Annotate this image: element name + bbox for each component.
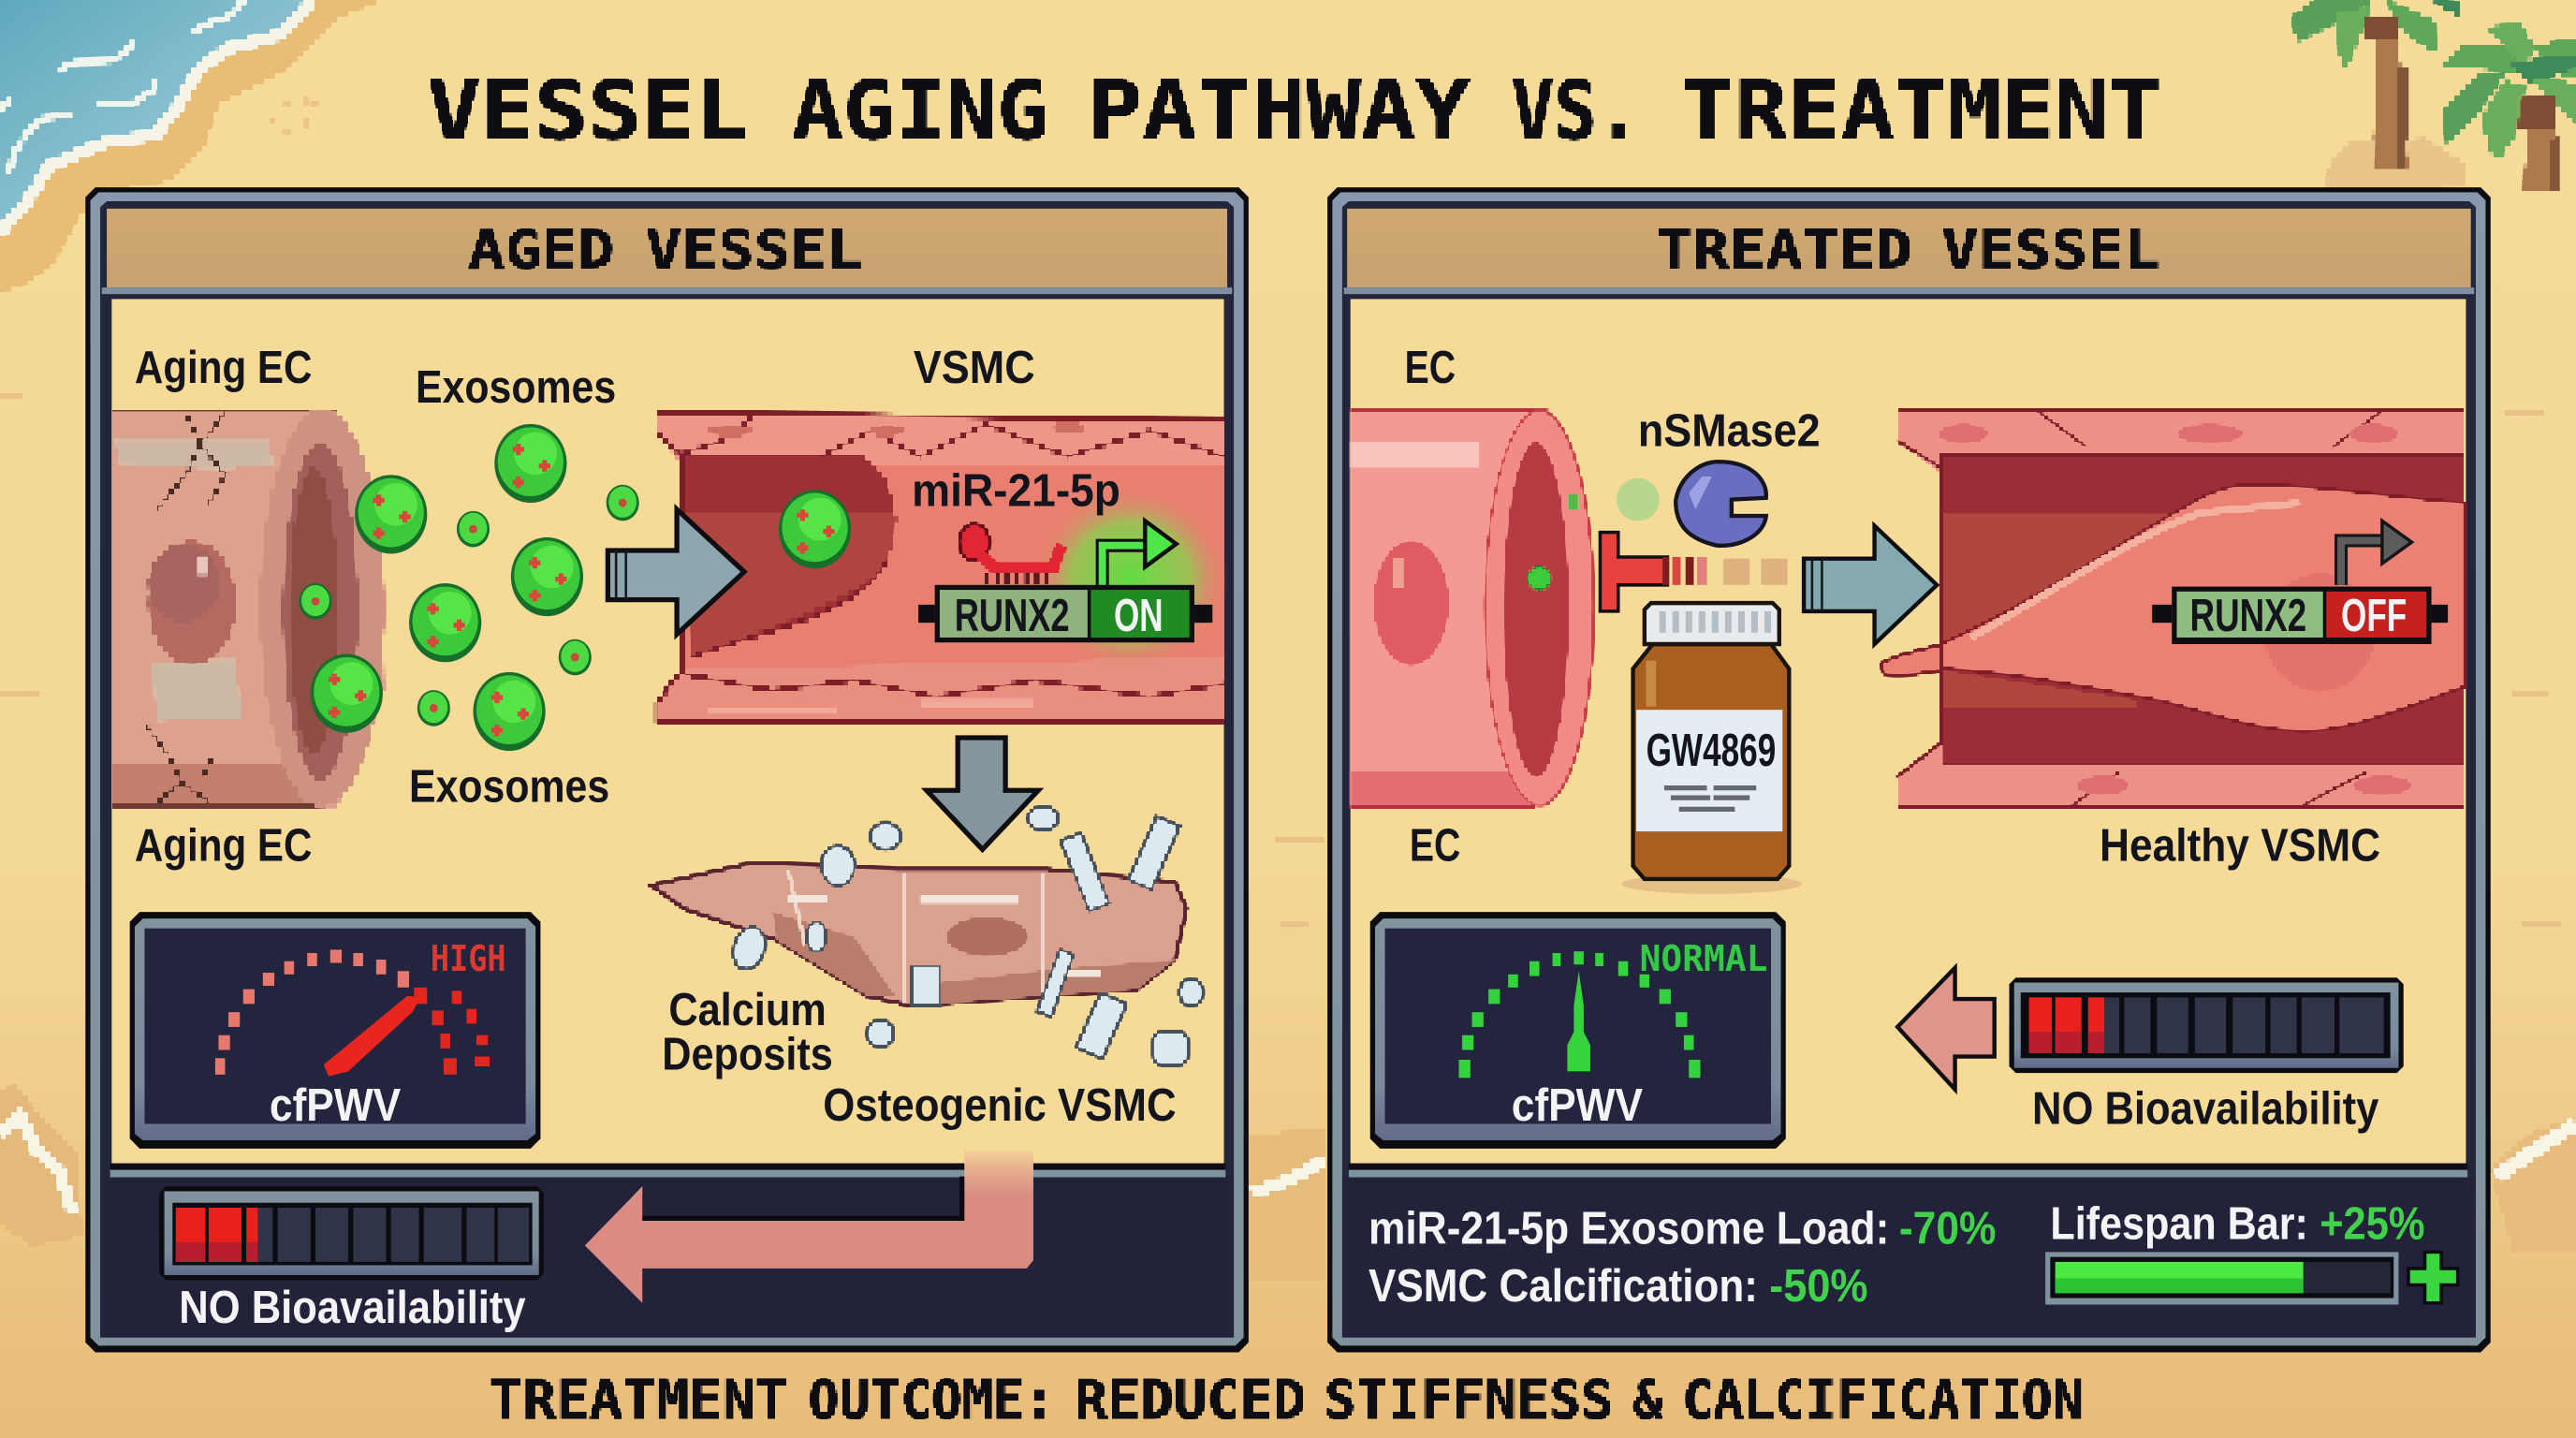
gauge panel: cfPWV normal [1370, 912, 1786, 1149]
footer outcome: REDUCED [1075, 1371, 1306, 1431]
illustration: GW4869 bottle [1621, 603, 1802, 894]
heading: treated vessel: TREATED [1656, 220, 1912, 281]
lifespan bar: +25% [2320, 1198, 2425, 1249]
labels: treated vessel: EC [1405, 343, 1456, 393]
heading: aged vessel [468, 220, 862, 281]
arrow: NO bar to gauge [1897, 968, 1995, 1090]
labels: aged vessel: Calcium [668, 985, 827, 1035]
footer outcome: OUTCOME: [809, 1371, 1055, 1431]
arrow: down to osteogenic VSMC [927, 738, 1038, 849]
outcome stats: VSMC Calcification: [1368, 1261, 1758, 1312]
labels: aged vessel: Deposits [662, 1030, 833, 1080]
labels: treated vessel: nSMase2 [1638, 406, 1821, 457]
RUNX2 OFF gene switch: OFF [2341, 591, 2407, 641]
RUNX2 ON gene switch with glow: ON [1114, 591, 1164, 641]
arrow: treatment to VSMC [1804, 526, 1937, 644]
exosome inside lumen [779, 490, 851, 568]
illustration: healthy EC cylinder [1351, 409, 1593, 809]
labels: aged vessel [135, 343, 1177, 1131]
exosomes [299, 424, 639, 751]
heading: aged vessel: AGED [468, 220, 614, 281]
heading: treated vessel: VESSEL [1942, 220, 2160, 281]
gauge panel: cfPWV normal: NORMAL [1640, 938, 1767, 980]
title: VS. [1512, 63, 1640, 158]
gauge panel: cfPWV high: cfPWV [270, 1080, 401, 1131]
gauge panel: cfPWV normal: cfPWV [1512, 1080, 1643, 1131]
labels: aged vessel: Aging EC [135, 343, 312, 393]
labels: aged vessel: miR-21-5p [912, 466, 1120, 517]
fading exosome [1617, 478, 1660, 521]
miRNA binding red [959, 524, 1061, 585]
labels: treated vessel: Healthy VSMC [2100, 821, 2380, 872]
illustration: GW4869 bottle: GW4869 [1647, 726, 1776, 776]
labels: aged vessel: VSMC [914, 343, 1035, 393]
title: TREATMENT [1680, 63, 2162, 158]
labels: aged vessel: Aging EC [135, 821, 312, 872]
illustration: aging endothelial cell cylinder [111, 409, 385, 809]
icon: nSMase2 enzyme [1676, 462, 1766, 546]
illustration: healthy VSMC vessel [1881, 411, 2465, 807]
illustration: osteogenic VSMC with calcium deposits [652, 807, 1203, 1064]
NO bioavailability bar: aged: NO Bioavailability [179, 1283, 526, 1333]
gauge panel: cfPWV high: HIGH [431, 938, 506, 980]
RUNX2 OFF gene switch: RUNX2 [2190, 591, 2306, 641]
heading: aged vessel: VESSEL [646, 220, 862, 281]
NO bioavailability bar: treated [2009, 977, 2404, 1134]
lifespan bar: Lifespan Bar: [2050, 1198, 2308, 1249]
title: PATHWAY [1088, 63, 1471, 158]
RUNX2 OFF gene switch [2152, 521, 2448, 644]
NO bioavailability bar: treated: NO Bioavailability [2032, 1083, 2379, 1134]
palm trees [2291, 0, 2576, 191]
outcome stats: -50% [1769, 1261, 1868, 1312]
title: VESSEL [427, 63, 749, 158]
title [427, 63, 2162, 158]
labels: aged vessel: Exosomes [416, 362, 616, 413]
footer outcome: TREATMENT [490, 1371, 788, 1431]
outcome stats: -70% [1899, 1204, 1996, 1255]
outcome stats: miR-21-5p Exosome Load: [1368, 1204, 1889, 1255]
illustration: VSMC vessel aged [657, 413, 1224, 721]
labels: treated vessel [1405, 343, 2380, 872]
panel: treated vessel [1327, 187, 2491, 1352]
heading: treated vessel [1656, 220, 2160, 281]
RUNX2 ON gene switch with glow [918, 487, 1229, 670]
labels: aged vessel: Exosomes [409, 761, 609, 812]
labels: aged vessel: Osteogenic VSMC [823, 1080, 1177, 1131]
outcome stats [1368, 1204, 1996, 1312]
lifespan bar [2045, 1198, 2458, 1305]
panel: aged vessel [85, 187, 1249, 1352]
title: AGING [792, 63, 1048, 158]
footer outcome: STIFFNESS [1325, 1371, 1614, 1431]
RUNX2 ON gene switch with glow: RUNX2 [955, 591, 1070, 641]
NO bioavailability bar: aged [159, 1186, 544, 1333]
labels: treated vessel: EC [1410, 821, 1460, 872]
inhibition bar [1600, 533, 1788, 611]
arrow: exosomes to VSMC [607, 509, 744, 634]
footer outcome: & [1633, 1371, 1662, 1431]
footer outcome: CALCIFICATION [1682, 1371, 2083, 1431]
gauge panel: cfPWV high [130, 912, 540, 1149]
arrow: osteogenic VSMC down to NO bar [585, 1151, 1033, 1303]
footer outcome [490, 1371, 2083, 1431]
